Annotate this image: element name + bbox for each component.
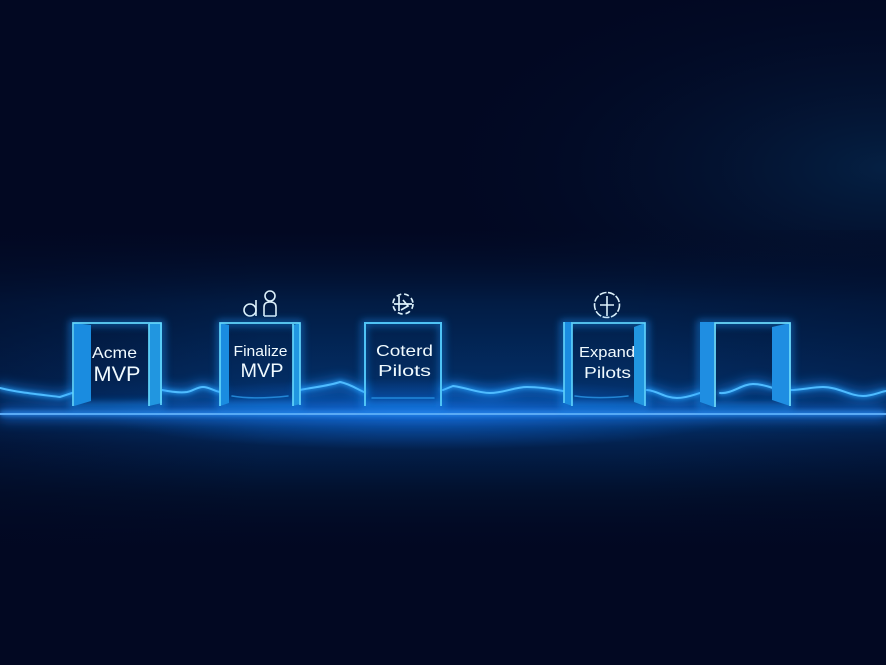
label bbox=[579, 344, 635, 382]
gate 4: Expand Pilots bbox=[563, 322, 646, 406]
label: MVP bbox=[94, 363, 140, 386]
baseline bbox=[0, 407, 886, 420]
wavy signal line bbox=[0, 382, 886, 398]
gate 5: empty bbox=[700, 322, 790, 407]
gate 1: Acme MVP bbox=[72, 323, 162, 406]
label bbox=[376, 343, 433, 380]
label: Coterd bbox=[376, 343, 433, 360]
label bbox=[92, 345, 140, 386]
label: Acme bbox=[92, 345, 137, 362]
gate 3: Coterd Pilots bbox=[364, 323, 442, 406]
label: MVP bbox=[240, 361, 284, 382]
icon: cluster above gate 3 bbox=[393, 294, 413, 314]
icon: compass above gate 4 bbox=[594, 292, 620, 318]
label: Expand bbox=[579, 344, 635, 361]
label: Pilots bbox=[378, 363, 431, 380]
label: Pilots bbox=[584, 365, 631, 382]
icon: figures above gate 2 bbox=[244, 291, 276, 316]
label bbox=[234, 343, 288, 382]
label: Finalize bbox=[234, 343, 288, 360]
gate 2: Finalize MVP bbox=[220, 323, 300, 406]
